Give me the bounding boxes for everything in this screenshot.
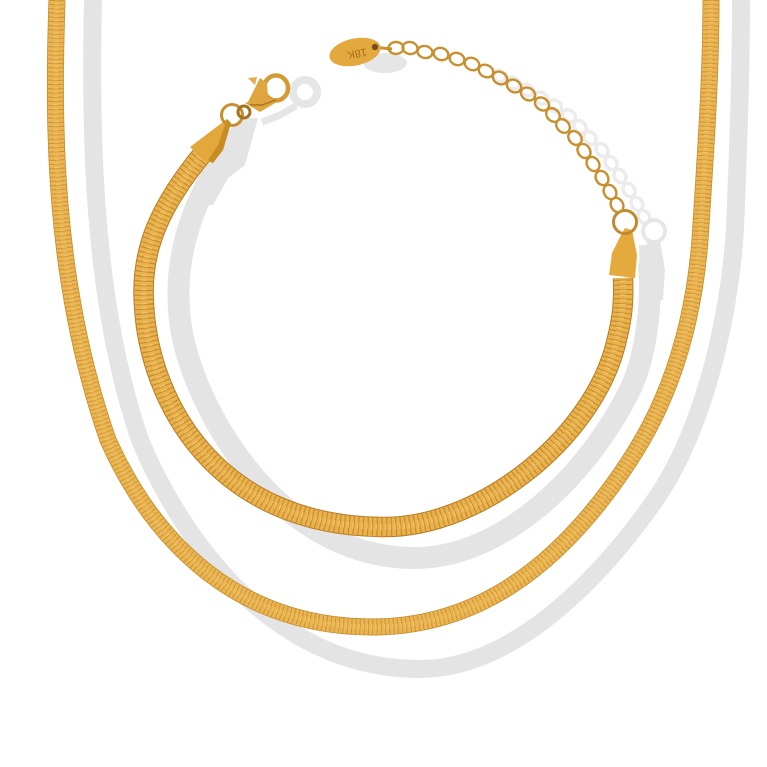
large jump ring xyxy=(614,210,636,234)
size tag stamped 18K xyxy=(327,33,383,71)
size tag stamped 18K: 18K xyxy=(346,45,368,61)
shadow: necklace xyxy=(92,0,741,669)
extender chain links xyxy=(388,41,626,214)
shadow: bracelet xyxy=(178,170,650,558)
left end cap xyxy=(190,119,231,163)
necklace: herringbone chain xyxy=(55,0,711,627)
tag connector link xyxy=(372,47,392,49)
shadow: clasp, tag and extender chain xyxy=(190,53,665,300)
bracelet: herringbone chain xyxy=(144,151,623,527)
lobster clasp xyxy=(222,76,288,126)
right end cap xyxy=(609,228,637,278)
